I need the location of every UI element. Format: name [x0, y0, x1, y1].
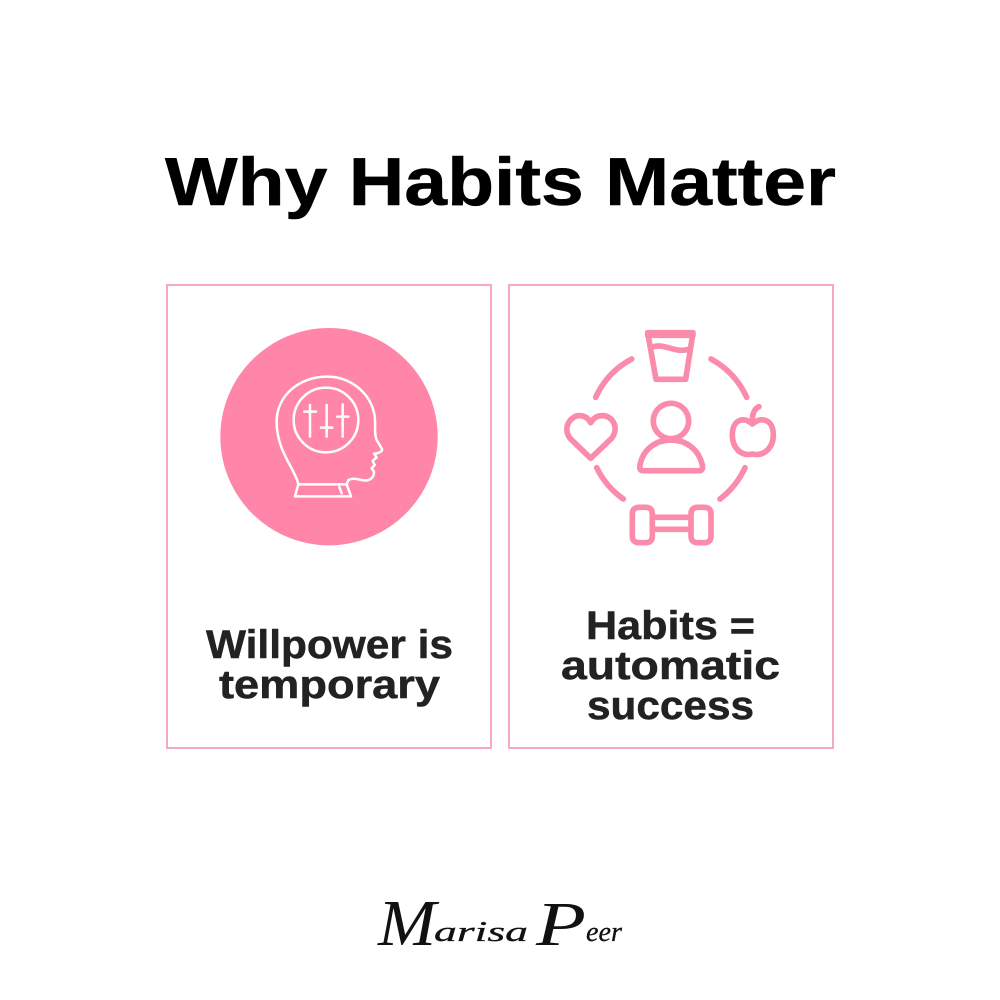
icon: dashed cycle ring — [596, 359, 747, 499]
signature: Marisa Peer: eer — [586, 916, 623, 948]
icon: apple — [732, 407, 773, 454]
label: habits = automatic success: success — [587, 684, 754, 728]
signature: Marisa Peer — [377, 887, 623, 960]
label: habits = automatic success: automatic — [561, 644, 780, 688]
icon: dumbbell — [632, 507, 711, 543]
panel: willpower — [167, 285, 491, 748]
label: habits = automatic success: Habits = — [586, 604, 755, 648]
signature: Marisa Peer: P — [535, 891, 586, 959]
signature: Marisa Peer: M — [377, 887, 440, 960]
icon: habit cycle around person — [567, 333, 773, 543]
label: willpower is temporary: Willpower is — [206, 623, 453, 667]
icon: head with sliders on pink circle — [220, 328, 438, 545]
icon: person — [640, 403, 703, 471]
title: Why Habits Matter — [165, 144, 836, 220]
label: willpower is temporary: temporary — [219, 663, 441, 707]
signature: Marisa Peer: arisa — [434, 916, 528, 948]
panel: habits — [509, 285, 833, 748]
icon: glass of water — [648, 333, 693, 379]
icon: heart — [567, 416, 615, 458]
